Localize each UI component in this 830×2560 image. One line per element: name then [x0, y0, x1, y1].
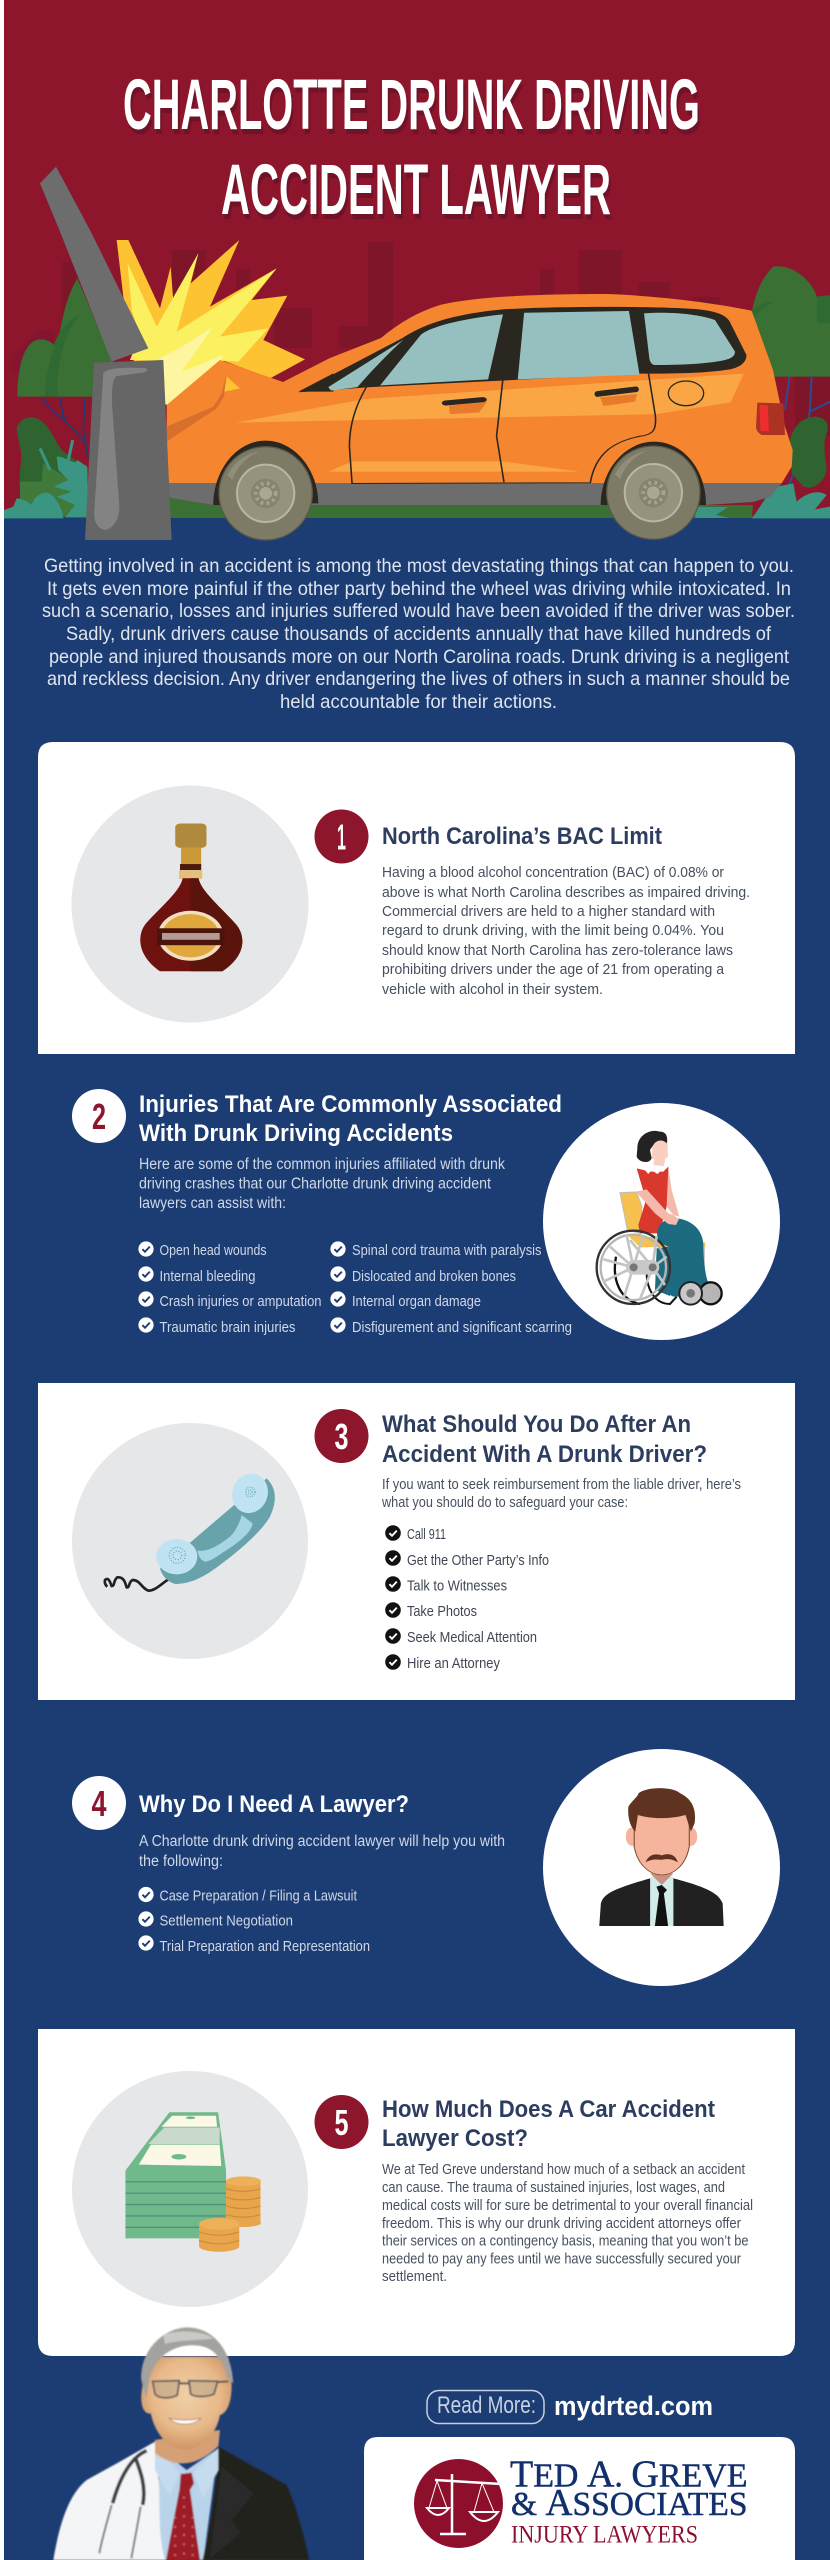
badge 5: 5: [334, 2102, 348, 2143]
section 4: why do I need a lawyer: [72, 1749, 780, 1986]
heading 2: With Drunk Driving Accidents: [139, 1120, 453, 1147]
heading 3: [382, 1411, 707, 1468]
body text 5: [382, 2161, 753, 2285]
body text 5: freedom. This is why our drunk driving accident attorneys offer: [382, 2215, 741, 2232]
heading 2: Injuries That Are Commonly Associated: [139, 1091, 562, 1118]
body text 4: A Charlotte drunk driving accident lawyer will help you with: [139, 1833, 505, 1850]
intro text: people and injured thousands more on our North Carolina roads. Drunk driving is a negligent: [49, 646, 790, 668]
sill: [168, 483, 782, 505]
intro text: Getting involved in an accident is among the most devastating things that can happen to you.: [44, 555, 794, 577]
heading 1: North Carolina’s BAC Limit: [382, 823, 662, 850]
heading 5: Lawyer Cost?: [382, 2125, 528, 2152]
body text 1: Having a blood alcohol concentration (BAC) of 0.08% or: [382, 864, 724, 881]
icon: liquor bottle: [140, 823, 242, 971]
intro text: such a scenario, losses and injuries suffered would have been avoided if the driver was sober.: [42, 600, 795, 622]
intro text: and reckless decision. Any driver endangering the lives of others in such a manner should be: [47, 668, 790, 690]
lawyer help list: Case Preparation / Filing a Lawsuit: [160, 1888, 358, 1904]
body text 1: prohibiting drivers under the age of 21 from operating a: [382, 961, 725, 978]
body text 2: [139, 1156, 505, 1212]
body text 5: settlement.: [382, 2268, 447, 2285]
action checklist: Seek Medical Attention: [407, 1629, 537, 1646]
body text 2: driving crashes that our Charlotte drunk driving accident: [139, 1176, 492, 1192]
action checklist: Talk to Witnesses: [407, 1578, 507, 1594]
action checklist: [385, 1525, 549, 1672]
body text 5: their services on a contingency basis, meaning that you won’t be: [382, 2232, 748, 2250]
right trees and bushes: [747, 266, 830, 518]
badge 1: 1: [337, 816, 346, 858]
body text 1: Commercial drivers are held to a higher standard with: [382, 903, 715, 920]
action checklist: Call 911: [407, 1526, 446, 1543]
body text 5: We at Ted Greve understand how much of a setback an accident: [382, 2161, 746, 2178]
lawyer help list: [138, 1887, 370, 1955]
badge 3: 3: [334, 1416, 348, 1457]
injury list: Open head wounds: [160, 1242, 267, 1259]
intro text: held accountable for their actions.: [280, 691, 557, 713]
ground strip: [170, 498, 753, 518]
panel 5: lawyer cost: [38, 2029, 795, 2356]
body text 3: [381, 1476, 741, 1511]
body text 1: [382, 864, 750, 998]
body text 3: what you should do to safeguard your case:: [381, 1494, 628, 1511]
car windows and details: [236, 307, 746, 483]
body text 1: vehicle with alcohol in their system.: [382, 981, 603, 998]
injury list: Internal bleeding: [160, 1268, 256, 1285]
explosion flame: [117, 240, 305, 405]
badge 3: [314, 1409, 368, 1463]
logo: scales of justice: [414, 2459, 503, 2548]
title: [123, 66, 702, 235]
body text 4: the following:: [139, 1853, 223, 1870]
badge 5: [314, 2095, 368, 2149]
logo text: INJURY LAWYERS: [511, 2522, 698, 2549]
badge 4: [72, 1776, 126, 1830]
panel 3: what to do after an accident: [38, 1383, 795, 1700]
body text 1: should know that North Carolina has zero-tolerance laws: [382, 942, 733, 959]
section 2: injuries: [72, 1089, 780, 1340]
logo text: [510, 2454, 748, 2549]
injury list: Internal organ damage: [352, 1293, 481, 1310]
portrait: doctor in white coat and jacket: [53, 2327, 309, 2560]
logo panel: [364, 2437, 795, 2560]
badge 1: [314, 810, 368, 864]
body text 3: If you want to seek reimbursement from the liable driver, here’s: [382, 1476, 741, 1493]
heading 4: Why Do I Need A Lawyer?: [139, 1791, 409, 1818]
rear window, handle, fuel cap and tail light: [597, 313, 785, 435]
injury list: Crash injuries or amputation: [160, 1293, 322, 1310]
injury list: Disfigurement and significant scarring: [352, 1319, 572, 1336]
body text 1: regard to drunk driving, with the limit being 0.04%. You: [382, 922, 724, 939]
intro text: Sadly, drunk drivers cause thousands of accidents annually that have killed hundreds of: [66, 623, 772, 645]
lawyer help list: Trial Preparation and Representation: [160, 1938, 370, 1955]
icon: money stack and coins: [125, 2112, 261, 2252]
heading 3: Accident With A Drunk Driver?: [382, 1441, 707, 1468]
body text 5: medical costs will for sure be detrimental to your overall financial: [382, 2197, 753, 2214]
logo text: TED A. GREVE: [510, 2454, 748, 2496]
panel 1: North Carolina's BAC limit: [38, 742, 795, 1054]
badge 4: 4: [92, 1783, 106, 1824]
intro text: It gets even more painful if the other party behind the wheel was driving while intoxicated. In: [47, 578, 791, 600]
injury list: Dislocated and broken bones: [352, 1268, 516, 1285]
body text 1: above is what North Carolina describes as impaired driving.: [382, 884, 750, 901]
injury list: Traumatic brain injuries: [160, 1319, 296, 1336]
intro text: [42, 555, 795, 713]
heading 2: [139, 1091, 562, 1147]
action checklist: Get the Other Party’s Info: [407, 1552, 549, 1569]
logo text: & ASSOCIATES: [511, 2482, 748, 2524]
injury list: [138, 1241, 572, 1336]
heading 5: How Much Does A Car Accident: [382, 2096, 715, 2123]
body text 5: can cause. The trauma of sustained injuries, lost wages, and: [382, 2179, 725, 2196]
rear wheel: [601, 442, 706, 539]
heading 3: What Should You Do After An: [382, 1411, 691, 1438]
body text 2: Here are some of the common injuries affiliated with drunk: [139, 1156, 505, 1173]
hero illustration: car crash: [4, 167, 830, 540]
front wheel: [213, 441, 318, 540]
badge 2: [72, 1089, 126, 1143]
badge 2: 2: [92, 1096, 106, 1137]
read more link: mydrted.com: [554, 2391, 713, 2421]
skyline: [62, 242, 830, 436]
left trees and bushes: [4, 278, 113, 518]
read more link: Read More:: [437, 2392, 536, 2419]
heading 5: [382, 2096, 715, 2152]
body text 2: lawyers can assist with:: [139, 1195, 286, 1212]
body text 4: [139, 1833, 505, 1870]
pole: [40, 167, 172, 540]
body text 5: needed to pay any fees until we have successfully secured your: [382, 2250, 741, 2268]
read more link: [427, 2390, 713, 2424]
icon: telephone handset: [105, 1468, 275, 1591]
car body: [167, 294, 793, 483]
icon: woman in wheelchair: [543, 1103, 780, 1340]
injury list: Spinal cord trauma with paralysis: [352, 1242, 542, 1259]
action checklist: Take Photos: [407, 1603, 477, 1620]
lawyer help list: Settlement Negotiation: [160, 1912, 293, 1930]
icon: lawyer portrait: [543, 1749, 780, 1986]
action checklist: Hire an Attorney: [407, 1655, 500, 1672]
crumpled hood shade: [167, 373, 333, 442]
